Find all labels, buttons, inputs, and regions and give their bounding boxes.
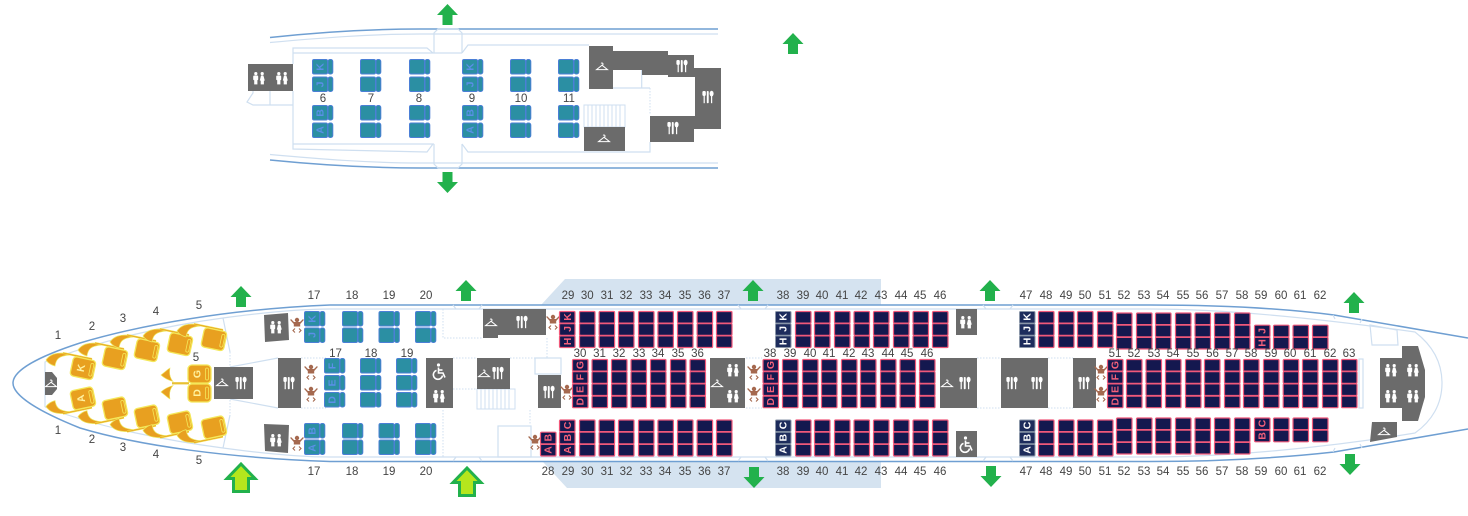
upper deck business seats: B [464, 109, 476, 117]
economy seats: mid cabin, DEFG: F [765, 373, 777, 380]
row numbers: middle: 30 [574, 348, 586, 360]
first class row numbers: 1 [55, 330, 61, 342]
arrow: exit up, door 4 [980, 280, 1000, 301]
first class row numbers [55, 300, 202, 467]
row numbers: middle: 52 [1128, 348, 1140, 360]
row numbers: bottom: 52 [1118, 466, 1130, 478]
main deck business seats: D [326, 396, 338, 404]
main deck stairs [477, 389, 515, 409]
row numbers: top: 62 [1314, 290, 1326, 302]
main deck fuselage outline [13, 305, 1468, 462]
economy seats: forward cabin, ABC [540, 420, 732, 456]
economy seats: rear cabin, HJK: K [1021, 313, 1033, 321]
economy seats: rear cabin, ABC: C [1256, 419, 1268, 427]
first class seats: A [75, 393, 88, 403]
economy seats: rear cabin, ABC: C [1021, 421, 1033, 429]
row numbers: middle: 53 [1148, 348, 1160, 360]
row numbers: middle: 34 [652, 348, 665, 360]
first class row numbers: 2 [89, 321, 95, 333]
row numbers: middle: 54 [1167, 348, 1180, 360]
economy seats: mid cabin, HJK: J [777, 326, 789, 332]
first class row numbers: 4 [153, 306, 160, 318]
row numbers: middle: 36 [691, 348, 704, 360]
first class seats: G [191, 370, 203, 378]
economy seats: mid cabin, ABC: B [777, 433, 789, 441]
economy seats: forward cabin, ABC: B [562, 433, 574, 441]
arrow: exit down, door 4 [980, 466, 1002, 487]
economy seats: rear cabin, DEFG [1108, 360, 1357, 408]
upper deck business seats: J [464, 81, 476, 87]
economy seats: rear cabin, HJK [1020, 312, 1328, 349]
row numbers: bottom: 35 [679, 466, 691, 478]
bottom light-blue cabin band: extra-legroom zone [543, 462, 881, 488]
row numbers: bottom: 53 [1138, 466, 1150, 478]
economy seats: mid cabin, DEFG: D [765, 397, 777, 405]
economy seats: rear cabin, DEFG: D [1109, 397, 1121, 405]
economy seats: mid cabin, DEFG [763, 360, 935, 408]
row numbers: top: 50 [1079, 290, 1091, 302]
row numbers: top: 53 [1138, 290, 1150, 302]
row numbers: bottom: 34 [659, 466, 672, 478]
first class seats: D [191, 389, 203, 397]
row numbers: top: 39 [797, 290, 809, 302]
row numbers: top: 42 [855, 290, 867, 302]
row numbers: bottom: 43 [875, 466, 887, 478]
economy seats: forward cabin, ABC: A [562, 446, 574, 454]
row numbers: bottom: 38 [777, 466, 789, 478]
row numbers: bottom: 50 [1079, 466, 1091, 478]
row numbers: middle: 56 [1206, 348, 1219, 360]
row numbers: bottom: 32 [620, 466, 632, 478]
economy seats: forward cabin, DEFG: E [574, 386, 586, 393]
arrow: upper deck exit up [437, 4, 458, 25]
row numbers: bottom: 48 [1040, 466, 1052, 478]
row numbers: middle: 33 [633, 348, 645, 360]
upper deck stairs [584, 105, 625, 127]
row numbers: middle: 41 [823, 348, 835, 360]
row numbers: bottom: 58 [1236, 466, 1248, 478]
economy seats: rear cabin, HJK: H [1256, 339, 1268, 347]
first class row numbers: 5 [196, 455, 202, 467]
first class row numbers: 4 [153, 449, 160, 461]
row numbers: top: 61 [1294, 290, 1306, 302]
row numbers: middle: 17 [329, 348, 342, 360]
arrow: boarding door 1 [227, 464, 255, 492]
row numbers: top: 31 [601, 290, 613, 302]
economy seats: forward cabin, DEFG [572, 360, 706, 408]
first class seats [46, 324, 227, 443]
row numbers: middle: 59 [1265, 348, 1277, 360]
row numbers: top: 52 [1118, 290, 1130, 302]
row numbers: bottom: 54 [1157, 466, 1170, 478]
row numbers: top: 47 [1020, 290, 1032, 302]
arrow: exit up, door 5 [1344, 292, 1364, 313]
row numbers: bottom: 39 [797, 466, 809, 478]
row numbers: bottom: 29 [562, 466, 574, 478]
upper deck fuselage outline [247, 29, 718, 168]
economy seats: rear cabin, ABC: A [1021, 446, 1033, 454]
row numbers: bottom: 33 [640, 466, 652, 478]
row numbers: top: 58 [1236, 290, 1248, 302]
economy seats: mid cabin, ABC: C [777, 421, 789, 429]
row numbers: middle: 51 [1109, 348, 1121, 360]
first class row numbers: 1 [55, 425, 61, 437]
main deck business seats: J [306, 332, 318, 338]
row numbers: middle: 35 [672, 348, 684, 360]
economy seats: rear cabin, DEFG: E [1109, 386, 1121, 393]
row numbers: middle: 39 [784, 348, 796, 360]
upper deck galley and closet [589, 46, 721, 142]
row numbers: top: 38 [777, 290, 789, 302]
row numbers: middle: 58 [1245, 348, 1257, 360]
economy seats: rear cabin, DEFG: G [1109, 361, 1121, 369]
row numbers: top: 49 [1060, 290, 1072, 302]
row numbers: top: 41 [836, 290, 848, 302]
upper deck business seats: K [314, 63, 326, 71]
row numbers: top: 60 [1275, 290, 1287, 302]
row numbers: middle: 42 [843, 348, 855, 360]
main deck business seats: F [326, 362, 338, 369]
row numbers: top: 51 [1099, 290, 1111, 302]
row numbers: bottom: 47 [1020, 466, 1032, 478]
first class row numbers: 5 [196, 300, 202, 312]
row numbers: middle: 61 [1304, 348, 1316, 360]
main deck business seats: K [306, 315, 318, 323]
main deck business seats: A [306, 444, 318, 452]
upper deck row numbers: 8 [416, 93, 422, 105]
economy seats: mid cabin, ABC [776, 420, 948, 456]
row numbers: middle: 38 [764, 348, 776, 360]
row numbers: bottom: 56 [1196, 466, 1208, 478]
row numbers: middle: 31 [593, 348, 606, 360]
economy seats: forward cabin, ABC: A [542, 446, 554, 454]
economy seats: rear cabin, ABC: B [1021, 433, 1033, 441]
row numbers: bottom: 51 [1099, 466, 1111, 478]
economy seats: rear cabin, ABC: B [1256, 432, 1268, 440]
upper deck business seats: A [464, 126, 476, 134]
economy seats: forward cabin, DEFG: F [574, 373, 586, 380]
row numbers: top: 20 [420, 290, 432, 302]
economy seats: mid cabin, ABC: A [777, 446, 789, 454]
economy seats: forward cabin, DEFG: D [574, 397, 586, 405]
row numbers: top: 35 [679, 290, 691, 302]
bassinet icons [290, 315, 1108, 450]
row numbers: middle: 32 [613, 348, 625, 360]
main deck business seats [304, 312, 436, 454]
row numbers: top: 37 [718, 290, 730, 302]
top light-blue cabin band: extra-legroom zone [541, 279, 881, 305]
row numbers: top: 56 [1196, 290, 1208, 302]
upper deck business seats: K [464, 63, 476, 71]
row numbers: top: 48 [1040, 290, 1052, 302]
upper deck row numbers: 7 [368, 93, 374, 105]
row numbers: top: 30 [581, 290, 594, 302]
row numbers: bottom: 37 [718, 466, 730, 478]
row numbers: top [308, 290, 1326, 302]
arrow: upper deck exit down [437, 172, 458, 193]
upper deck row numbers: 9 [469, 93, 475, 105]
economy seats: forward cabin, HJK: K [562, 313, 574, 321]
row numbers: top: 57 [1216, 290, 1228, 302]
row numbers: bottom: 20 [420, 466, 432, 478]
economy seats: rear cabin, HJK: J [1021, 326, 1033, 332]
arrow: exit up, nose door [230, 286, 252, 307]
row numbers: top: 19 [383, 290, 395, 302]
row numbers: top: 46 [934, 290, 946, 302]
first class row numbers: 3 [120, 442, 126, 454]
upper deck business seats: B [314, 109, 326, 117]
row numbers: bottom: 61 [1294, 466, 1306, 478]
row numbers: bottom: 30 [581, 466, 594, 478]
first class seats: K [75, 363, 88, 373]
row numbers: top: 32 [620, 290, 632, 302]
row numbers: middle [329, 348, 1355, 360]
economy seats: forward cabin, HJK: H [562, 338, 574, 345]
row numbers: middle: 60 [1284, 348, 1296, 360]
row numbers: bottom: 31 [601, 466, 613, 478]
row numbers: bottom: 42 [855, 466, 867, 478]
economy seats: rear cabin, HJK: H [1021, 338, 1033, 345]
economy seats: forward cabin, HJK [560, 312, 732, 348]
economy seats: forward cabin, HJK: J [562, 326, 574, 332]
row numbers: bottom: 41 [836, 466, 848, 478]
row numbers: top: 36 [698, 290, 711, 302]
arrow: exit down, door 3 [744, 467, 764, 488]
row numbers: top: 18 [346, 290, 358, 302]
row numbers: middle: 19 [401, 348, 413, 360]
arrow: boarding door 2 [453, 468, 481, 496]
row numbers: bottom: 57 [1216, 466, 1228, 478]
main deck business seats: E [326, 379, 338, 387]
row numbers: top: 43 [875, 290, 887, 302]
row numbers: bottom: 49 [1060, 466, 1072, 478]
arrow: standalone legend up [782, 33, 804, 54]
economy seats: rear cabin, DEFG: F [1109, 373, 1121, 380]
row numbers: top: 29 [562, 290, 574, 302]
upper deck row numbers: 6 [320, 93, 326, 105]
row numbers: middle: 63 [1343, 348, 1355, 360]
arrow: exit down, door 5 [1340, 454, 1360, 475]
economy seats: forward cabin, DEFG: G [574, 361, 586, 369]
economy seats: mid cabin, DEFG: G [765, 361, 777, 369]
row numbers: top: 45 [914, 290, 926, 302]
row numbers: top: 44 [895, 290, 908, 302]
upper deck business seats [312, 60, 579, 138]
economy seats: mid cabin, HJK [776, 312, 948, 348]
upper deck lavatory [248, 64, 293, 91]
row numbers: bottom: 62 [1314, 466, 1326, 478]
row numbers: middle: 62 [1324, 348, 1336, 360]
row numbers: middle: 40 [804, 348, 816, 360]
row numbers: top: 40 [816, 290, 828, 302]
row numbers: top: 59 [1255, 290, 1267, 302]
economy seats: forward cabin, ABC: C [562, 421, 574, 429]
upper deck row numbers: 11 [563, 93, 575, 105]
upper deck closet [584, 127, 625, 151]
row numbers: bottom: 28 [542, 466, 554, 478]
row numbers: middle: 46 [921, 348, 933, 360]
row numbers: top: 55 [1177, 290, 1189, 302]
row numbers: bottom: 45 [914, 466, 926, 478]
row numbers: bottom: 17 [308, 466, 320, 478]
row numbers: bottom: 44 [895, 466, 908, 478]
row numbers: middle: 18 [365, 348, 377, 360]
row numbers: bottom: 59 [1255, 466, 1267, 478]
row numbers: top: 17 [308, 290, 320, 302]
row numbers: middle: 55 [1187, 348, 1199, 360]
upper deck business seats: A [314, 126, 326, 134]
economy seats: mid cabin, HJK: K [777, 313, 789, 321]
row numbers: middle: 45 [901, 348, 913, 360]
arrow: exit up, door 3 [742, 280, 764, 301]
row numbers: top: 33 [640, 290, 652, 302]
arrow: exit up, door 2 [456, 280, 476, 301]
upper deck business seats: J [314, 81, 326, 87]
economy seats: rear cabin, ABC [1020, 418, 1328, 456]
row numbers: bottom: 40 [816, 466, 828, 478]
economy seats: rear cabin, HJK: J [1256, 328, 1268, 334]
main deck business seats: B [306, 427, 318, 435]
row numbers: bottom: 60 [1275, 466, 1287, 478]
row numbers: bottom: 18 [346, 466, 358, 478]
row numbers: middle: 57 [1226, 348, 1238, 360]
economy seats: forward cabin, ABC: B [542, 433, 554, 441]
economy seats: mid cabin, DEFG: E [765, 386, 777, 393]
first class row numbers: 3 [120, 313, 126, 325]
first class row numbers: 2 [89, 434, 95, 446]
row numbers: bottom [308, 466, 1326, 478]
row numbers: top: 54 [1157, 290, 1170, 302]
first class row numbers: 5 [193, 352, 199, 364]
row numbers: top: 34 [659, 290, 672, 302]
row numbers: bottom: 46 [934, 466, 946, 478]
upper deck row numbers: 10 [515, 93, 527, 105]
economy seats: mid cabin, HJK: H [777, 338, 789, 345]
upper deck row numbers [320, 93, 575, 105]
row numbers: middle: 44 [882, 348, 895, 360]
main deck lavatories, galleys and closets [45, 309, 1425, 457]
row numbers: bottom: 36 [698, 466, 711, 478]
row numbers: bottom: 19 [383, 466, 395, 478]
row numbers: middle: 43 [862, 348, 874, 360]
row numbers: bottom: 55 [1177, 466, 1189, 478]
